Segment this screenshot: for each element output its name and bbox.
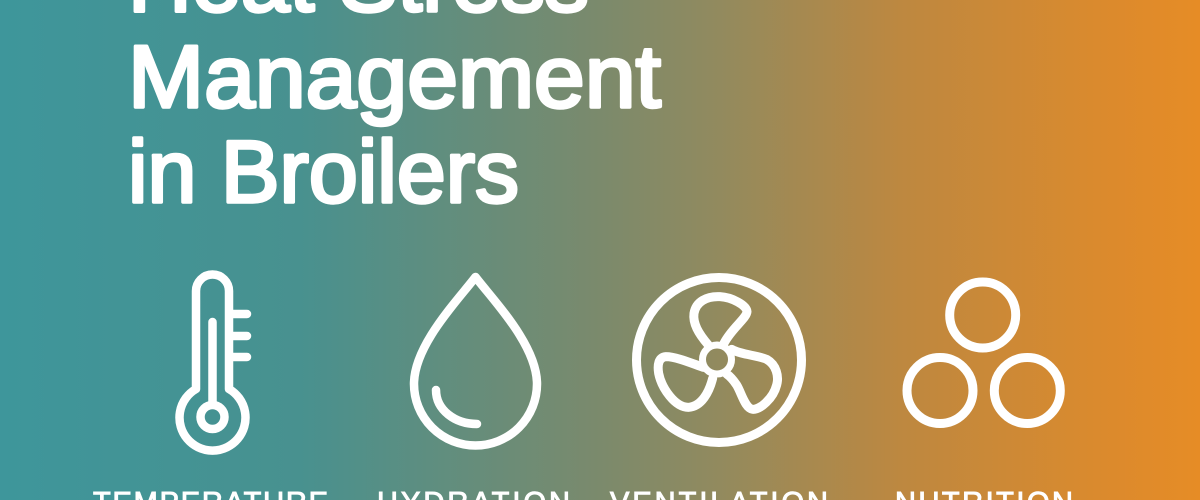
icon: water drop [414,277,537,445]
title [128,0,661,221]
icon: fan [636,278,802,442]
icon: thermometer [180,274,247,451]
title: in Broilers [128,122,519,221]
icon: nutrition circles [907,282,1060,424]
title: Management [128,27,661,126]
